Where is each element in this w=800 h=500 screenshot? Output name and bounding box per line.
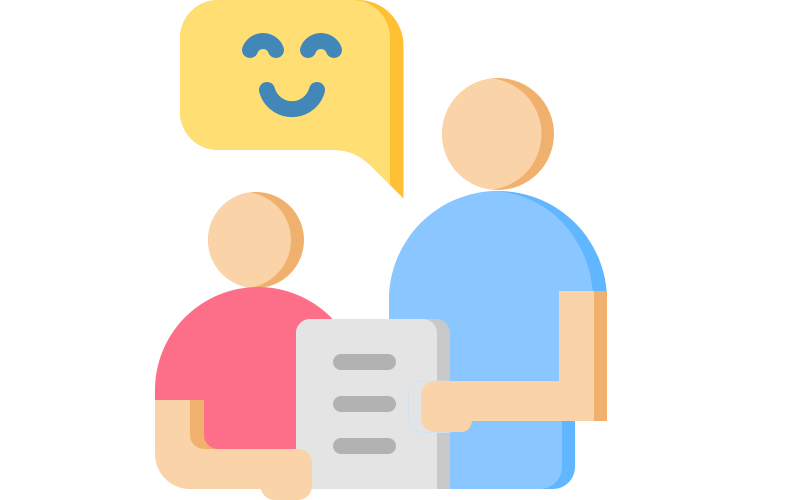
- left eye: [250, 41, 276, 50]
- text line 2: [333, 396, 396, 412]
- right eye: [308, 41, 334, 50]
- adult arm: [421, 291, 594, 432]
- child sleeve shadow: [190, 400, 230, 462]
- adult blue torso: [375, 191, 607, 489]
- adult fingertip: [445, 421, 472, 432]
- adult arm shadow: [594, 291, 607, 421]
- child head: [208, 192, 304, 288]
- bubble face: [180, 0, 390, 185]
- adult figure: [375, 78, 607, 489]
- adult head: [442, 78, 554, 190]
- adult arm holding document: [421, 291, 607, 432]
- thumb outline on document: [408, 381, 460, 432]
- child arm: [155, 400, 312, 500]
- document page: [296, 319, 437, 489]
- text line 1: [333, 354, 396, 370]
- icon: smiling face: [250, 41, 334, 109]
- document shadow edge: [296, 319, 450, 489]
- child figure: [155, 192, 332, 449]
- speech bubble: [180, 0, 404, 198]
- document: [296, 319, 460, 489]
- text line 3: [333, 438, 396, 454]
- mouth: [267, 90, 317, 109]
- bubble shadow edge: [180, 0, 404, 198]
- child pink torso: [155, 287, 361, 449]
- illustration: adult and child talking over a document: [155, 0, 607, 500]
- child arm holding document: [155, 400, 312, 500]
